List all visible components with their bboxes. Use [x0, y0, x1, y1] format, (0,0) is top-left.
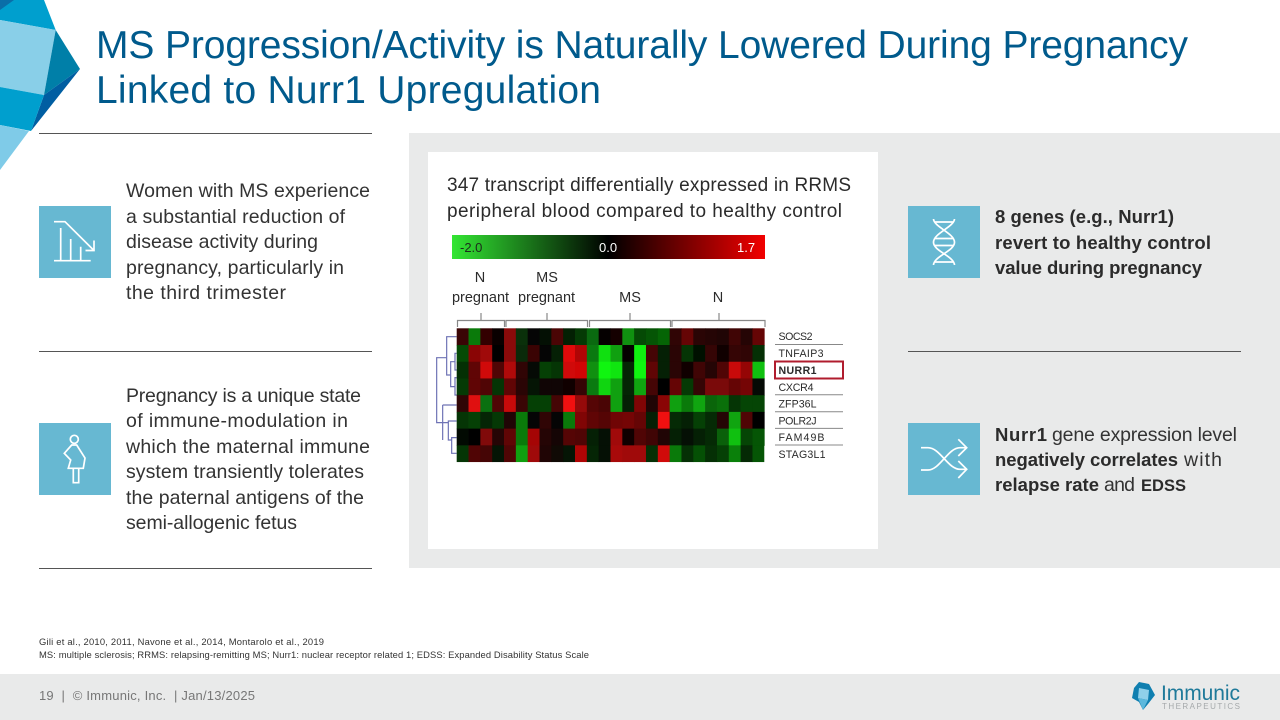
text: immune modulation: Pregnancy is a unique state — [126, 385, 361, 407]
panel: right point one — [908, 206, 1211, 278]
gene labels: TNFAIP3 — [778, 348, 824, 360]
text: disease activity reduction: pregnancy, particularly in — [126, 257, 344, 279]
gene labels: CXCR4 — [778, 382, 814, 394]
text: immune modulation: which the maternal immune — [125, 436, 370, 458]
group labels: MS — [619, 290, 641, 306]
group labels: N — [475, 270, 485, 286]
text: negative correlation: EDSS — [1141, 477, 1186, 495]
icon: shuffle arrows — [908, 423, 980, 495]
text: disease activity reduction: a substantial reduction of — [126, 206, 346, 228]
icon: declining bar chart — [39, 206, 111, 278]
gene labels: ZFP36L — [778, 398, 817, 410]
corner logo graphic — [0, 0, 80, 170]
text: negative correlation: and — [1104, 474, 1135, 496]
group labels: pregnant — [452, 290, 509, 306]
chart title — [447, 175, 851, 222]
text: genes revert: value during pregnancy — [995, 257, 1203, 278]
colour scale legend: 1.7 — [737, 240, 755, 255]
text: negative correlation: negatively correlates — [995, 449, 1178, 470]
text: disease activity reduction — [126, 180, 370, 304]
text: negative correlation — [995, 424, 1237, 496]
text: genes revert — [995, 206, 1211, 278]
chart title: 347 transcript differentially expressed in RRMS — [447, 175, 851, 196]
text: disease activity reduction: disease activity during — [126, 231, 318, 253]
Immunic logo: Immunic — [1161, 682, 1240, 705]
NURR1 highlight box — [775, 362, 843, 378]
gene labels: FAM49B — [778, 432, 824, 444]
text: negative correlation: with — [1183, 449, 1222, 471]
text: negative correlation: relapse rate — [995, 474, 1099, 495]
group labels: MS — [536, 270, 558, 286]
group labels: pregnant — [518, 290, 575, 306]
panel: heatmap card — [428, 152, 878, 549]
group brackets — [458, 313, 765, 327]
group labels — [452, 270, 723, 306]
text: negative correlation: Nurr1 — [995, 424, 1047, 445]
title: Linked to Nurr1 Upregulation — [96, 69, 601, 112]
chart title: peripheral blood compared to healthy control — [447, 201, 842, 222]
text: immune modulation: semi-allogenic fetus — [126, 512, 297, 534]
Immunic logo — [1132, 682, 1240, 711]
gene labels: POLR2J — [778, 416, 816, 428]
gene labels — [775, 331, 843, 461]
colour scale legend — [452, 235, 765, 259]
title — [96, 24, 1188, 112]
references and abbreviations: MS: multiple sclerosis; RRMS: relapsing-remitting MS; Nurr1: nuclear receptor related 1; EDSS: Expanded Disability Status Scale — [39, 649, 589, 660]
heatmap — [457, 328, 765, 462]
panel: right point two — [908, 423, 1237, 496]
references and abbreviations: Gili et al., 2010, 2011, Navone et al., 2014, Montarolo et al., 2019 — [39, 636, 324, 647]
colour scale legend: 0.0 — [599, 240, 617, 255]
text: disease activity reduction: Women with MS experience — [126, 180, 370, 202]
text: disease activity reduction: the third trimester — [126, 282, 286, 304]
text: genes revert: 8 genes (e.g., Nurr1) — [995, 206, 1174, 227]
footer bar — [0, 674, 1280, 720]
panel: grey background — [409, 133, 1280, 568]
text: negative correlation: gene expression level — [1052, 424, 1237, 446]
gene labels: SOCS2 — [778, 331, 813, 343]
icon: pregnant woman — [39, 423, 111, 495]
panel: left point one — [39, 180, 370, 304]
text: immune modulation: of immune-modulation in — [126, 410, 348, 432]
Immunic logo: THERAPEUTICS — [1162, 702, 1240, 711]
text: genes revert: revert to healthy control — [995, 232, 1211, 253]
text: immune modulation — [125, 385, 370, 534]
group labels: N — [713, 290, 723, 306]
title: MS Progression/Activity is Naturally Lowered During Pregnancy — [96, 24, 1188, 67]
references and abbreviations — [39, 636, 589, 660]
icon: DNA helix — [908, 206, 980, 278]
footer text: 19 | © Immunic, Inc. | Jan/13/2025 — [39, 688, 255, 703]
gene labels: NURR1 — [778, 365, 817, 377]
panel: left point two — [39, 385, 370, 534]
dendrogram — [437, 337, 457, 453]
text: immune modulation: the paternal antigens of the — [126, 487, 364, 509]
text: immune modulation: system transiently tolerates — [126, 461, 364, 483]
colour scale legend: -2.0 — [460, 240, 482, 255]
gene labels: STAG3L1 — [778, 449, 826, 461]
